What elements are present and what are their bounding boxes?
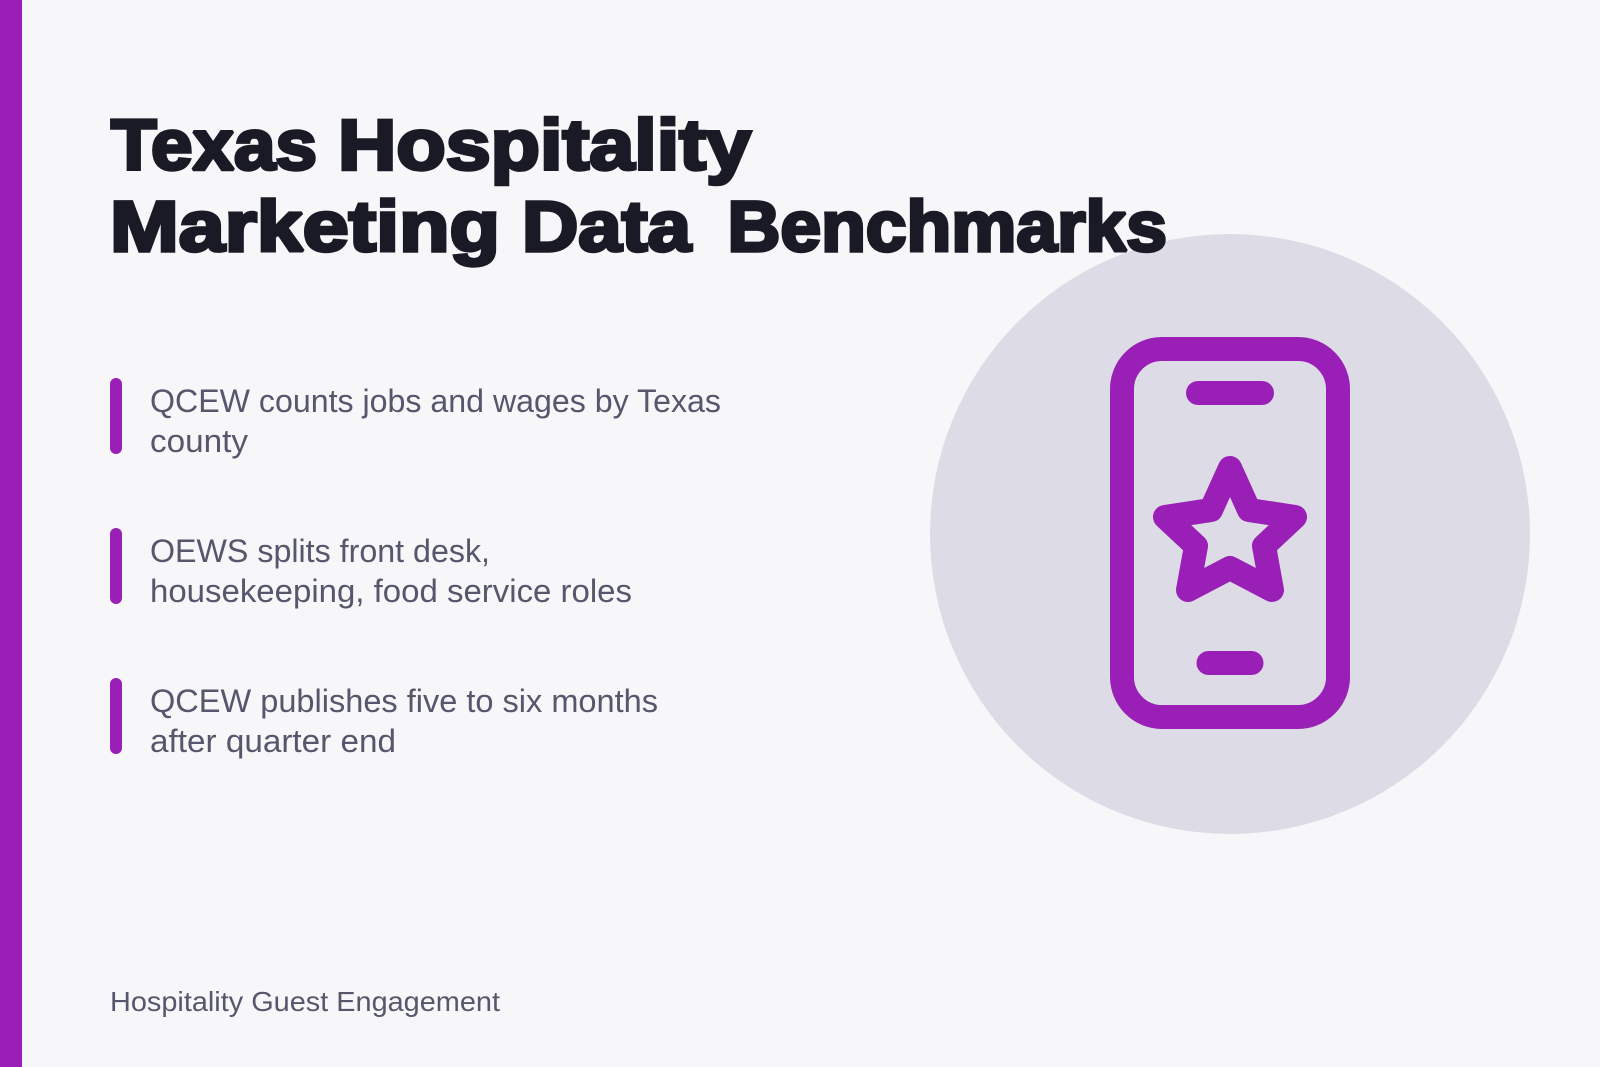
bullet text 3 <box>150 683 658 759</box>
bullet text 1 <box>150 383 721 459</box>
left accent bar <box>0 0 22 1067</box>
bullet text 1: QCEW counts jobs and wages by Texas <box>150 383 721 419</box>
icon backdrop circle <box>930 234 1530 834</box>
title <box>110 106 1167 267</box>
title line 2: Data <box>522 188 692 267</box>
bullet marker 1 <box>110 378 122 454</box>
bullet text 2 <box>150 533 632 609</box>
bullet marker 2 <box>110 528 122 604</box>
title line 2 <box>110 188 1167 267</box>
title line 1: Texas <box>111 106 317 186</box>
bullet 1 <box>110 378 721 459</box>
bullet text 1: county <box>150 423 248 459</box>
footer label: Hospitality Guest Engagement <box>110 986 500 1017</box>
phone speaker pill <box>1198 381 1262 405</box>
title line 2: Benchmarks <box>728 188 1167 267</box>
bullet text 3: QCEW publishes five to six months <box>150 683 658 719</box>
star <box>1165 468 1295 590</box>
phone home pill <box>1208 651 1252 675</box>
bullet 3 <box>110 678 658 759</box>
title line 1: Hospitality <box>338 106 752 186</box>
bullet text 3: after quarter end <box>150 723 396 759</box>
icon: phone with star <box>1122 349 1338 717</box>
title line 2: Marketing <box>110 188 500 267</box>
bullet 2 <box>110 528 632 609</box>
title line 1 <box>111 106 752 186</box>
bullet text 2: housekeeping, food service roles <box>150 573 632 609</box>
bullet marker 3 <box>110 678 122 754</box>
phone body <box>1122 349 1338 717</box>
bullet text 2: OEWS splits front desk, <box>150 533 490 569</box>
